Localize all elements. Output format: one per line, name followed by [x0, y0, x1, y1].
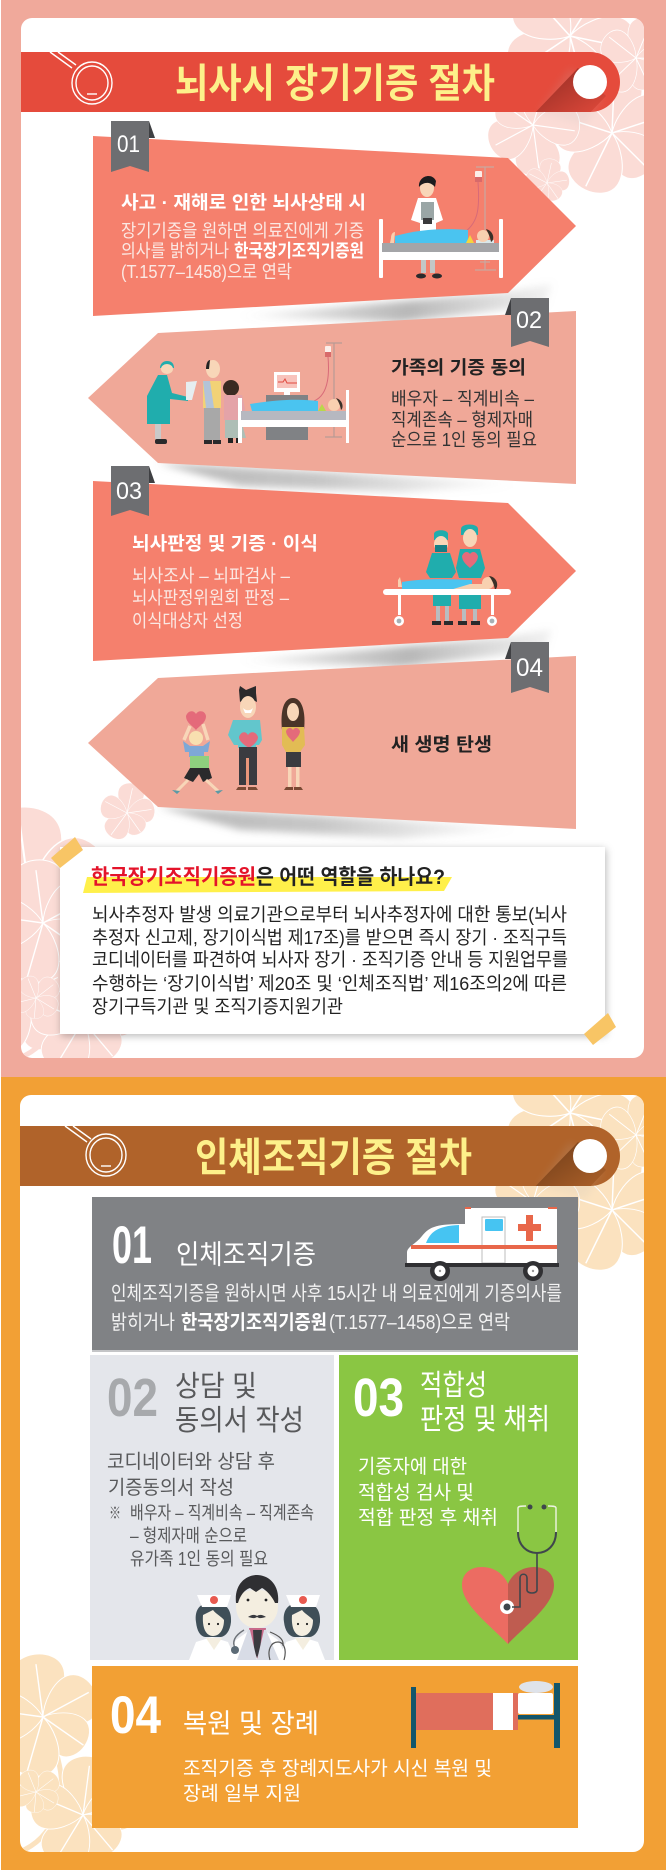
ribbon 03: 03: [116, 478, 142, 505]
panel 01 body: [111, 1282, 562, 1334]
panel 02 body: 코디네이터와 상담 후: [107, 1451, 275, 1473]
panel 01 body: 인체조직기증을 원하시면 사후 15시간 내 의료진에게 기증의사를: [111, 1282, 562, 1305]
panel 01 body: (T.1577–1458)으로 연락: [329, 1311, 510, 1334]
panel 02 body: 기증동의서 작성: [108, 1477, 234, 1499]
panel 02: consultation: [90, 1355, 334, 1660]
step 01 text: 한국장기조직기증원: [234, 241, 364, 261]
panel 02 body: – 형제자매 순으로: [130, 1526, 247, 1546]
number 04: 04: [110, 1686, 161, 1745]
callout body: 뇌사추정자 발생 의료기관으로부터 뇌사추정자에 대한 통보(뇌사: [92, 904, 567, 925]
callout body: 수행하는 ‘장기이식법’ 제20조 및 ‘인체조직법’ 제16조의2에 따른: [92, 973, 567, 994]
callout heading: 한국장기조직기증원: [91, 866, 256, 889]
icon: ambulance: [405, 1207, 559, 1281]
number 03: 03: [353, 1368, 404, 1428]
panel: tissue donation card: [20, 1095, 644, 1852]
panel 02 heading: 상담 및: [175, 1371, 257, 1403]
panel 01 body: 한국장기조직기증원: [181, 1311, 327, 1334]
title: 뇌사시 장기기증 절차: [175, 62, 495, 106]
callout: role of KODA: [51, 837, 616, 1045]
illustration: doctor and patient on bed: [379, 167, 503, 278]
step 03 text: [132, 533, 318, 631]
panel 02 body: ※: [109, 1504, 121, 1523]
step 01 text: 사고 · 재해로 인한 뇌사상태 시: [121, 192, 366, 213]
icon: magnifier outline: [65, 1126, 126, 1176]
ribbon 01: [111, 121, 155, 172]
step 02 text: 가족의 기증 동의: [391, 357, 526, 378]
illustration: doctor and nurses: [189, 1575, 325, 1660]
step 04 text: 새 생명 탄생: [391, 734, 492, 755]
heading banner: 뇌사시 장기기증 절차: [21, 52, 620, 125]
callout body: [92, 904, 568, 1017]
step 01 text: [121, 192, 366, 282]
step 02 text: 배우자 – 직계비속 –: [391, 389, 534, 409]
panel 02 heading: 동의서 작성: [175, 1405, 304, 1437]
panel: brain-death donation card: [21, 18, 644, 1058]
callout heading: [91, 866, 445, 889]
panel 03: suitability: [339, 1355, 578, 1660]
title: 인체조직기증 절차: [195, 1136, 472, 1180]
panel 01: tissue donation: [92, 1197, 578, 1350]
step 03 text: 뇌사조사 – 뇌파검사 –: [132, 566, 290, 586]
panel 01 body: 밝히거나: [111, 1311, 175, 1334]
panel 02 body: 유가족 1인 동의 필요: [130, 1549, 268, 1569]
ribbon 02: 02: [516, 307, 542, 334]
step 03 text: 이식대상자 선정: [132, 611, 243, 631]
callout body: 추정자 신고제, 장기이식법 제17조)를 받으면 즉시 장기 · 조직구득: [92, 927, 567, 948]
step 03 text: 뇌사판정 및 기증 · 이식: [132, 533, 318, 554]
callout body: 장기구득기관 및 조직기증지원기관: [92, 996, 343, 1017]
tape bottom-right: [584, 1013, 616, 1045]
callout body: 코디네이터를 파견하여 뇌사자 장기 · 조직기증 안내 등 지원업무를: [92, 949, 568, 970]
callout heading: 은 어떤 역할을 하나요?: [256, 866, 445, 889]
panel 04 body: 조직기증 후 장례지도사가 시신 복원 및: [183, 1758, 492, 1780]
panel 04: restoration and funeral: [92, 1666, 578, 1828]
highlight stroke: [83, 877, 452, 893]
step 01 text: (T.1577–1458)으로 연락: [121, 262, 292, 282]
icon: magnifier outline: [50, 52, 112, 104]
step 03 arrow: [93, 466, 576, 667]
panel 03 body: 적합성 검사 및: [358, 1482, 474, 1504]
ribbon 04: [505, 642, 549, 693]
number 02: 02: [107, 1368, 158, 1428]
step 04 arrow: [88, 642, 576, 838]
panel 02 body: 배우자 – 직계비속 – 직계존속: [130, 1503, 314, 1523]
tape top-left: [51, 837, 83, 868]
illustration: family consent at bedside: [147, 343, 349, 444]
illustration: surgeons and stretcher: [383, 524, 511, 626]
step 02 text: [391, 357, 537, 450]
page background: orange section: [0, 1077, 666, 1870]
panel 03 heading: 판정 및 채취: [420, 1404, 550, 1436]
ribbon 01: 01: [117, 131, 140, 158]
panel 03 heading: 적합성: [420, 1370, 487, 1402]
step 02 arrow: [88, 298, 576, 492]
step 03 text: 뇌사판정위원회 판정 –: [132, 588, 289, 608]
ribbon 02: [505, 298, 549, 347]
ribbon 03: [111, 466, 155, 516]
step 01 text: 의사를 밝히거나: [121, 241, 229, 261]
ribbon 04: 04: [516, 654, 543, 682]
panel 03 heading: [420, 1370, 550, 1436]
panel 04 body: 장례 일부 지원: [183, 1783, 301, 1805]
number 01: 01: [112, 1216, 152, 1275]
illustration: heart with stethoscope: [462, 1504, 556, 1644]
panel 04 body: [183, 1758, 492, 1805]
panel 02 body: [107, 1451, 314, 1569]
panel 02 heading: [175, 1371, 304, 1437]
panel 04 heading: 복원 및 장례: [183, 1709, 319, 1739]
panel 01 heading: 인체조직기증: [176, 1240, 316, 1270]
step 01 arrow: [93, 121, 576, 322]
icon: bed: [411, 1681, 560, 1748]
panel 03 body: [358, 1456, 498, 1529]
step 02 text: 직계존속 – 형제자매: [391, 410, 533, 430]
panel 03 body: 적합 판정 후 채취: [358, 1507, 498, 1529]
panel 03 body: 기증자에 대한: [358, 1456, 467, 1478]
step 01 text: 장기기증을 원하면 의료진에게 기증: [121, 221, 364, 241]
step 02 text: 순으로 1인 동의 필요: [391, 430, 537, 450]
heading banner: 인체조직기증 절차: [20, 1126, 620, 1199]
page background: pink section: [0, 0, 666, 1077]
illustration: happy family with hearts: [172, 686, 305, 794]
